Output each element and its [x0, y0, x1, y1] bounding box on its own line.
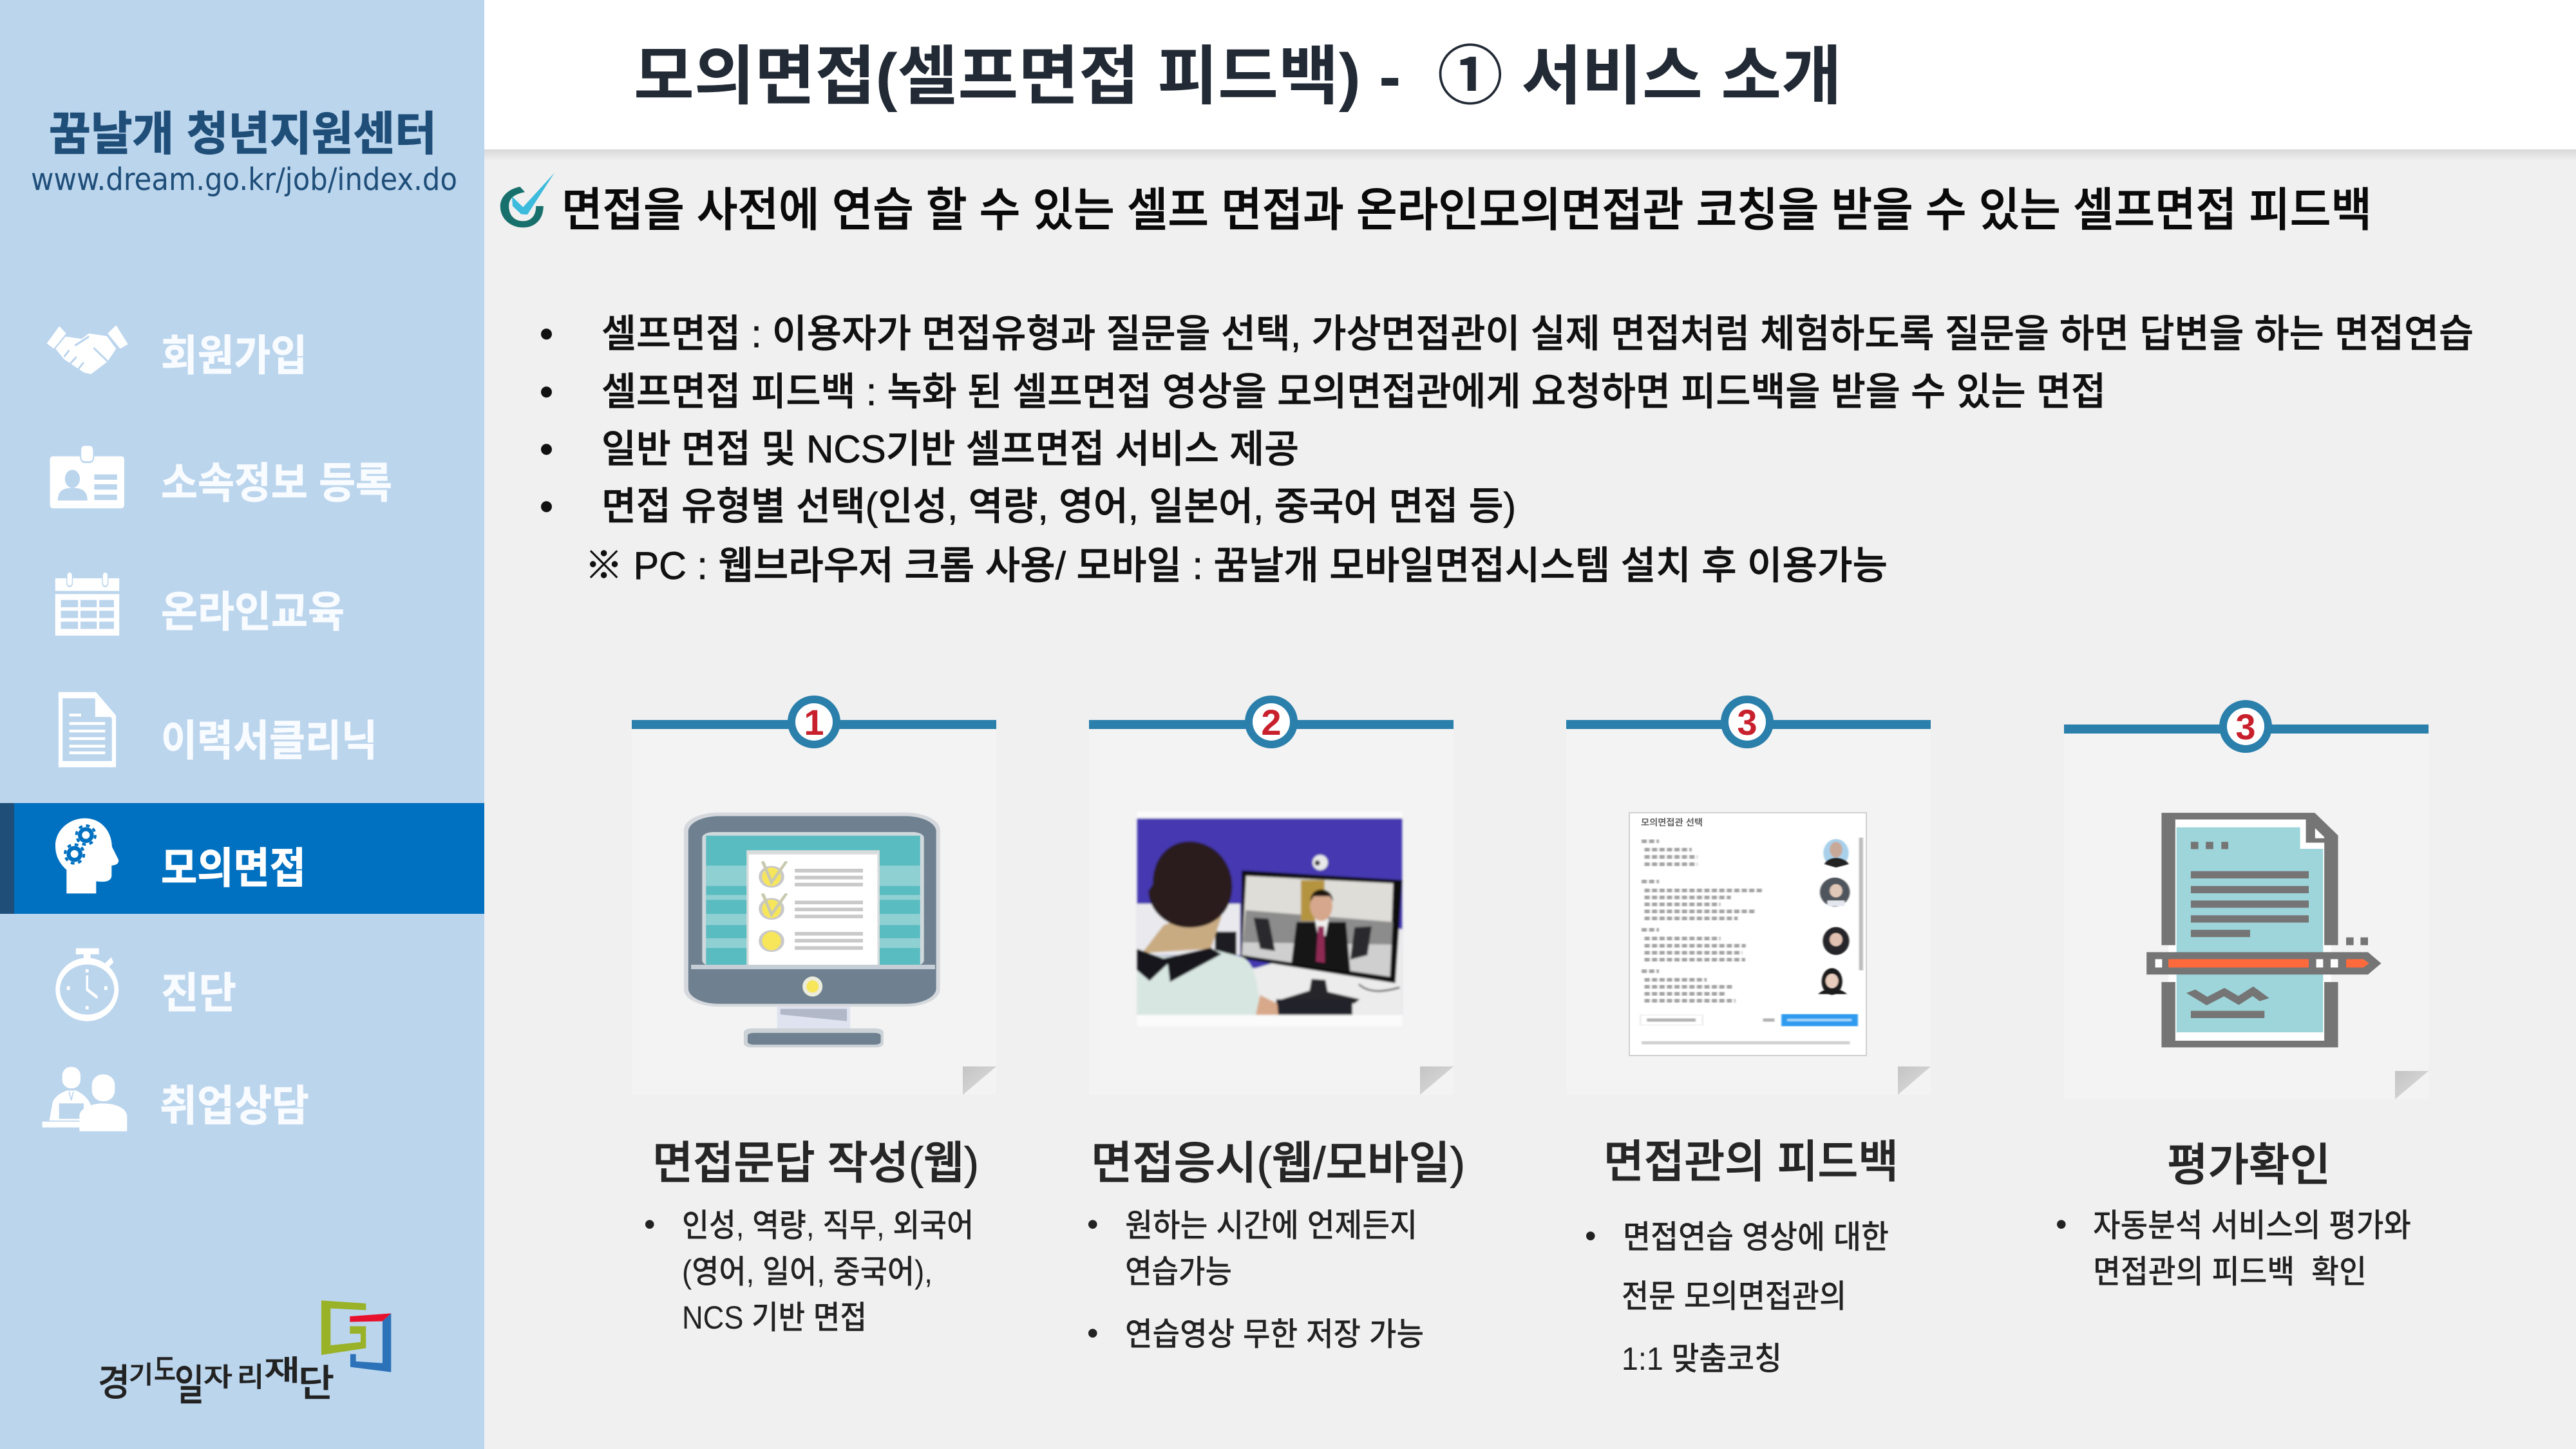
- text block: step 3: [1585, 1218, 1889, 1377]
- text block: step 4: [2056, 1206, 2411, 1290]
- text block: step 2: •: [1087, 1206, 1099, 1242]
- text block: step 4: •: [2056, 1206, 2067, 1242]
- icon: head with gears: [55, 819, 118, 893]
- title: 모의면접(셀프면접 피드백) - ① 서비스 소개: [634, 41, 1842, 113]
- header bar: [484, 0, 2576, 161]
- logo text: 재: [264, 1355, 300, 1387]
- panel: sidebar: [0, 0, 484, 1449]
- badge 3: [1721, 696, 1774, 748]
- badge 4: 3: [2235, 706, 2256, 747]
- badge 2: [1245, 696, 1298, 748]
- menu: active item background: [0, 803, 484, 914]
- badge 1: [788, 696, 840, 748]
- sidebar heading: 꿈날개 청년지원센터: [49, 109, 437, 160]
- menu: 이력서클리닉: 이력서클리닉: [161, 717, 377, 764]
- text block: step 2: 연습영상 무한 저장 가능: [1125, 1316, 1424, 1352]
- text block: step 1: •: [644, 1206, 656, 1242]
- panel: step 4 card: [2056, 700, 2429, 1290]
- photo: video interview: [1137, 811, 1402, 1026]
- icon: counselors: [43, 1067, 127, 1132]
- text block: step 3: •: [1585, 1218, 1596, 1254]
- icon: stopwatch: [58, 951, 117, 1018]
- menu: 진단: 진단: [161, 969, 236, 1017]
- text block: step 1: (영어, 일어, 중국어),: [682, 1254, 933, 1290]
- note: ※ PC : 웹브라우저 크롬 사용/ 모바일 : 꿈날개 모바일면접시스템 설치 후 이용가능: [585, 544, 1888, 587]
- text block: step 2: 원하는 시간에 언제든지: [1125, 1208, 1417, 1244]
- panel: step 1 card: [632, 696, 996, 1336]
- bullet 3: 일반 면접 및 NCS기반 셀프면접 서비스 제공: [601, 428, 1299, 471]
- text block: feature bullets: •: [540, 428, 553, 471]
- logo text: 도: [154, 1353, 176, 1387]
- screenshot title: 모의면접관 선택: [1641, 817, 1703, 828]
- logo text: 단: [298, 1363, 334, 1405]
- menu: 모의면접: 모의면접: [161, 844, 306, 892]
- badge 2: 2: [1261, 702, 1282, 743]
- text block: step 3: 전문 모의면접관의: [1622, 1278, 1846, 1314]
- icon: id card: [50, 445, 124, 508]
- text block: step 3: 면접연습 영상에 대한: [1623, 1219, 1889, 1255]
- logo text: 기: [129, 1362, 153, 1389]
- logo text: 자: [204, 1363, 232, 1392]
- text block: step 2: 연습가능: [1125, 1254, 1232, 1290]
- logo text: 경: [98, 1362, 130, 1404]
- heading: step 2: 면접응시(웹/모바일): [1091, 1138, 1465, 1188]
- heading: step 1: 면접문답 작성(웹): [652, 1138, 979, 1188]
- icon: document: [61, 695, 114, 764]
- heading: step 4: 평가확인: [2167, 1140, 2331, 1190]
- text block: step 2: [1087, 1206, 1424, 1352]
- icon: document and pencil: [2146, 816, 2382, 1044]
- heading: step 3: 면접관의 피드백: [1604, 1137, 1899, 1187]
- text block: feature bullets: •: [540, 370, 553, 413]
- menu: 소속정보 등록: 소속정보 등록: [161, 459, 392, 507]
- text block: feature bullets: •: [540, 485, 553, 528]
- icon: check mark: [500, 173, 554, 227]
- subheading: 면접을 사전에 연습 할 수 있는 셀프 면접과 온라인모의면접관 코칭을 받을 수 있는 셀프면접 피드백: [562, 185, 2372, 236]
- badge 4: [2219, 700, 2272, 753]
- bullet 1: 셀프면접 : 이용자가 면접유형과 질문을 선택, 가상면접관이 실제 면접처럼 체험하도록 질문을 하면 답변을 하는 면접연습: [601, 312, 2474, 355]
- text block: step 2: •: [1087, 1315, 1099, 1351]
- bullet 4: 면접 유형별 선택(인성, 역량, 영어, 일본어, 중국어 면접 등): [601, 485, 1516, 528]
- text block: step 4: 자동분석 서비스의 평가와: [2093, 1208, 2411, 1244]
- menu: 온라인교육: 온라인교육: [161, 588, 345, 636]
- icon: foundation logo mark: [321, 1300, 391, 1372]
- badge 3: 3: [1737, 702, 1757, 743]
- panel: step 3 card: [1566, 696, 1931, 1377]
- bullet 2: 셀프면접 피드백 : 녹화 된 셀프면접 영상을 모의면접관에게 요청하면 피드백을 받을 수 있는 면접: [601, 370, 2106, 413]
- panel: step 2 card: [1087, 696, 1465, 1352]
- screenshot: interviewer selection: [1629, 813, 1866, 1056]
- logo text: 리: [237, 1362, 264, 1392]
- menu: 회원가입: 회원가입: [161, 332, 307, 379]
- logo text: [98, 1353, 334, 1409]
- sidebar url: www.dream.go.kr/job/index.do: [31, 162, 457, 198]
- text block: step 3: 1:1 맞춤코칭: [1622, 1341, 1782, 1377]
- badge 1: 1: [804, 702, 824, 743]
- icon: handshake: [47, 325, 128, 374]
- icon: calendar: [55, 572, 119, 636]
- text block: step 1: NCS 기반 면접: [682, 1300, 867, 1336]
- text block: step 1: 인성, 역량, 직무, 외국어: [682, 1208, 974, 1244]
- icon: monitor: [684, 813, 940, 1047]
- text block: feature bullets: •: [540, 312, 553, 355]
- text block: step 1: [644, 1206, 974, 1336]
- text block: step 4: 면접관의 피드백 확인: [2093, 1254, 2367, 1290]
- text block: feature bullets: [540, 312, 2474, 587]
- menu: 취업상담: 취업상담: [160, 1082, 309, 1130]
- logo text: 일: [175, 1361, 204, 1409]
